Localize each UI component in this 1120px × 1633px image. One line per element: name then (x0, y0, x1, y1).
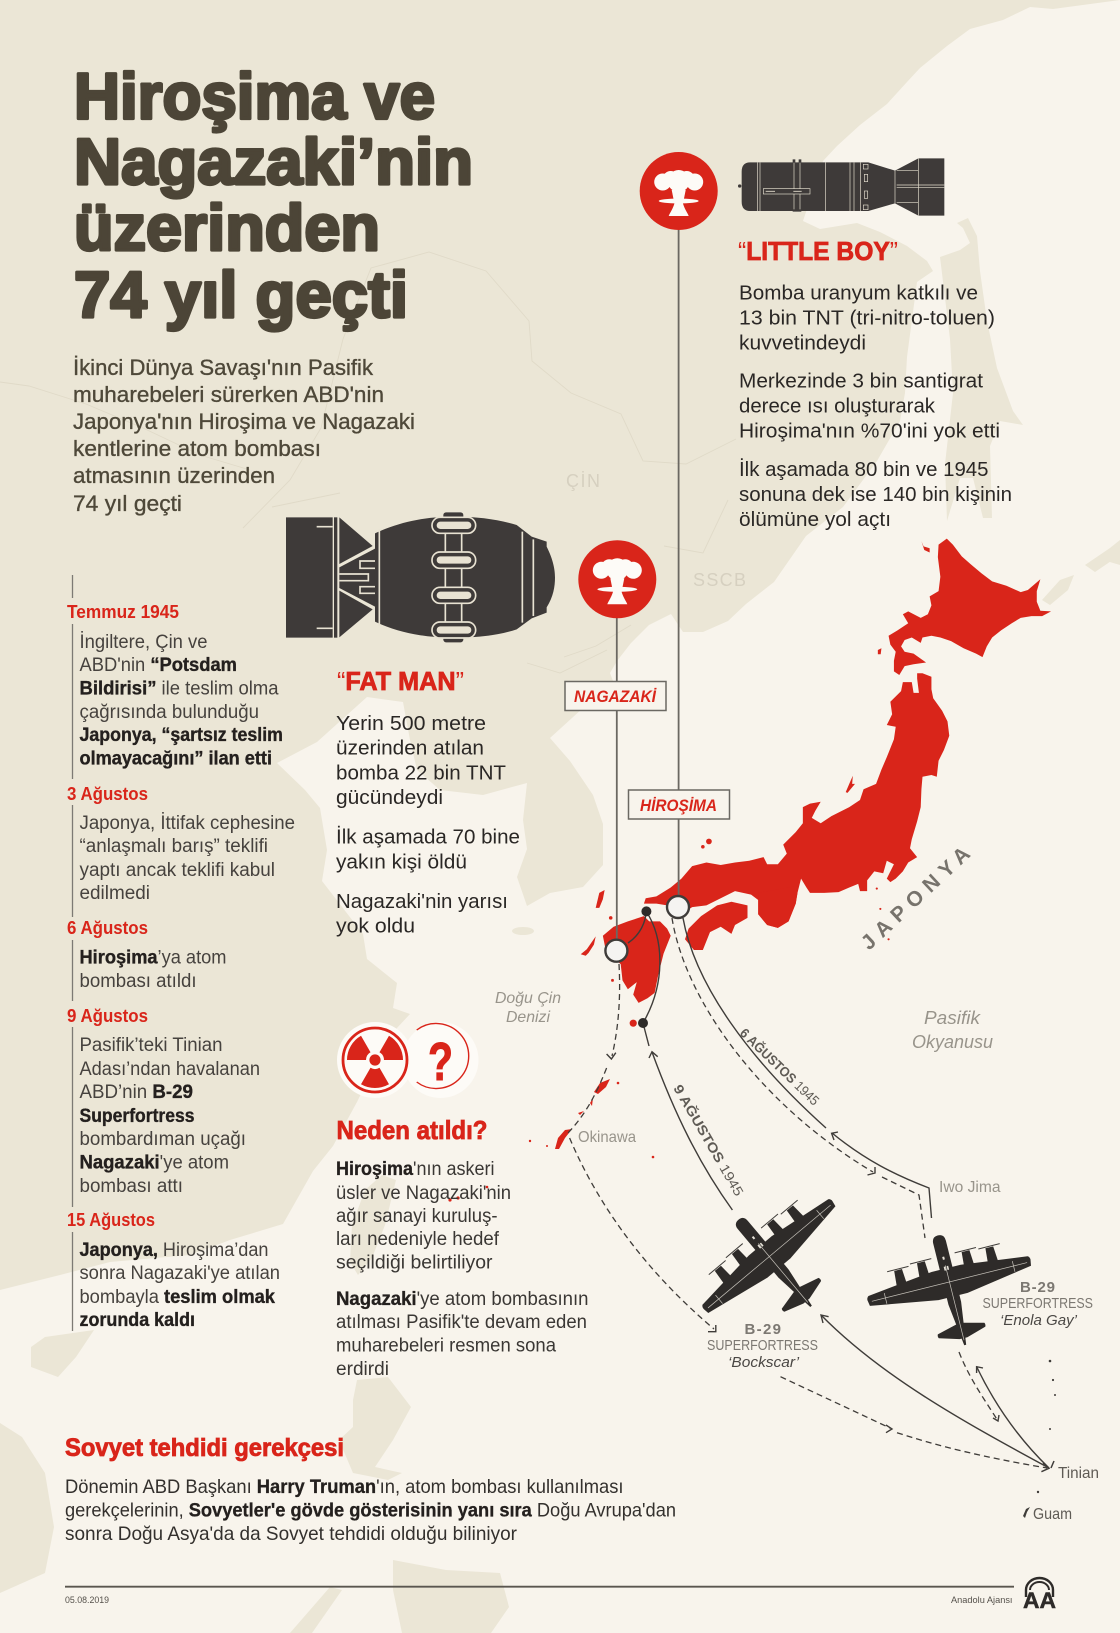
text: Fat Man details: üzerinden atılan (336, 736, 484, 760)
text: reasons: atılması Pasifik'te devam eden (336, 1312, 587, 1333)
text: Little Boy details: ölümüne yol açtı (739, 508, 891, 531)
intro paragraph: 74 yıl geçti (73, 491, 182, 516)
country label: Japonya: JAPONYA (857, 842, 975, 955)
footer (65, 1578, 1056, 1613)
timeline entries: bombası atıldı (80, 971, 196, 992)
label: Bockscar: B-29 (744, 1321, 781, 1338)
Neden atıldı panel (336, 1022, 588, 1380)
timeline entries: zorunda kaldı (80, 1310, 195, 1331)
text: Soviet rationale: Dönemin ABD Başkanı Harry Truman'ın, atom bombası kullanılması (65, 1476, 624, 1498)
text: Little Boy details: kuvvetindeydi (739, 332, 866, 354)
timeline entries: yaptı ancak teklifi kabul (80, 860, 275, 881)
marker: Hiroşima target (667, 896, 689, 918)
map: Ryukyu islands in red (448, 1079, 654, 1202)
map labels: seas and places: Guam (1033, 1506, 1072, 1523)
label: Enola Gay: B-29 (1020, 1279, 1055, 1296)
text: Little Boy details: İlk aşamada 80 bin ve 1945 (739, 458, 988, 481)
title: Nagazaki’nin (74, 125, 473, 198)
timeline entries: Superfortress (80, 1106, 194, 1127)
timeline entries: edilmedi (80, 883, 150, 904)
label: Nagazaki: NAGAZAKİ (574, 687, 657, 706)
text: Fat Man details: bomba 22 bin TNT (336, 762, 506, 784)
title: Hiroşima ve (74, 60, 435, 132)
title (74, 60, 473, 331)
title: 74 yıl geçti (74, 258, 408, 331)
timeline entries: bombardıman uçağı (80, 1129, 246, 1150)
intro paragraph: Japonya'nın Hiroşima ve Nagazaki (73, 409, 415, 434)
text: reasons (336, 1159, 588, 1380)
text: Soviet rationale: sonra Doğu Asya'da da Sovyet tehdidi olduğu biliniyor (65, 1523, 517, 1545)
timeline dates: Temmuz 1945 (67, 602, 179, 622)
map labels: seas and places: Doğu Çin (495, 990, 561, 1007)
waypoint dots (638, 906, 651, 1028)
date: 05.08.2019 (65, 1595, 109, 1606)
timeline entries: ABD'nin “Potsdam (80, 655, 237, 676)
logo: AA (1023, 1578, 1056, 1613)
heading: Fat Man: “FAT MAN” (337, 666, 464, 696)
icon: Little Boy bomb (738, 158, 944, 216)
icon: mushroom cloud badge (Fat Man) (578, 540, 656, 618)
timeline dates: 15 Ağustos (67, 1210, 155, 1230)
Fat Man panel (286, 512, 656, 945)
heading: Little Boy: “LITTLE BOY” (738, 236, 898, 266)
text: Soviet rationale (65, 1476, 676, 1545)
timeline entries: “anlaşmalı barış” teklifi (80, 836, 268, 857)
label: Enola Gay: SUPERFORTRESS (982, 1296, 1093, 1312)
source: Anadolu Ajansı (951, 1595, 1012, 1606)
route label: 6 Ağustos 1945: 6 AĞUSTOS 1945 (737, 1025, 822, 1108)
map: Pacific islands (1023, 1360, 1056, 1518)
logo: AA: AA (1023, 1588, 1056, 1613)
label: Bockscar: ‘Bockscar’ (728, 1355, 800, 1371)
timeline entries: bombayla teslim olmak (80, 1287, 275, 1308)
timeline dates (67, 602, 179, 1230)
text: Little Boy details: Hiroşima'nın %70'ini yok etti (739, 420, 1000, 442)
text: Little Boy details (739, 282, 1012, 531)
heading: Sovyet tehdidi gerekçesi: Sovyet tehdidi gerekçesi (65, 1434, 344, 1462)
icon: question mark badge: ? (428, 1032, 453, 1092)
icon: B-29 Bockscar (674, 1166, 875, 1360)
intro paragraph (73, 355, 415, 516)
map labels: seas and places: Iwo Jima (939, 1179, 1001, 1196)
timeline entries: Japonya, “şartsız teslim (80, 725, 283, 746)
map labels: seas and places: Pasifik (924, 1008, 981, 1028)
text: Fat Man details: yok oldu (336, 914, 415, 938)
label: Enola Gay (982, 1279, 1093, 1329)
text: Little Boy details: Bomba uranyum katkılı ve (739, 282, 978, 304)
text: Little Boy details: derece ısı oluşturarak (739, 394, 936, 418)
icon: Fat Man bomb (286, 512, 555, 642)
timeline entries: Bildirisi” ile teslim olma (80, 678, 279, 700)
text: Fat Man details: İlk aşamada 70 bine (336, 826, 520, 848)
intro paragraph: İkinci Dünya Savaşı'nın Pasifik (73, 355, 374, 380)
map labels: seas and places: Tinian (1058, 1465, 1099, 1482)
text: Little Boy details: Merkezinde 3 bin santigrat (739, 370, 983, 392)
text: Fat Man details: Yerin 500 metre (336, 712, 486, 735)
text: reasons: Nagazaki'ye atom bombasının (336, 1289, 588, 1310)
intro paragraph: muharebeleri sürerken ABD'nin (73, 382, 384, 407)
timeline entries (80, 632, 295, 1331)
timeline entries: Nagazaki'ye atom (80, 1152, 229, 1174)
timeline entries: Pasifik’teki Tinian (80, 1035, 222, 1056)
timeline rule (72, 575, 74, 1331)
label: Hiroşima (628, 790, 730, 819)
intro paragraph: atmasının üzerinden (73, 463, 275, 488)
timeline entries: çağrısında bulunduğu (80, 702, 259, 723)
Little Boy panel (640, 152, 1012, 900)
text: reasons: üsler ve Nagazaki'nin (336, 1183, 511, 1204)
text: reasons: seçildiği belirtiliyor (336, 1252, 493, 1274)
timeline entries: Hiroşima’ya atom (80, 948, 226, 968)
timeline entries: İngiltere, Çin ve (80, 632, 208, 653)
timeline entries: bombası attı (80, 1176, 183, 1197)
icon: question mark badge (402, 1022, 478, 1098)
intro paragraph: kentlerine atom bombası (73, 436, 321, 461)
map labels: countries: ÇİN (566, 471, 600, 491)
label: Bockscar: SUPERFORTRESS (707, 1338, 818, 1354)
text: Little Boy details: sonuna dek ise 140 bin kişinin (739, 483, 1012, 506)
map labels: countries: SSCB (693, 570, 746, 590)
timeline entries: sonra Nagazaki'ye atılan (80, 1263, 280, 1284)
Soviet section (65, 1434, 676, 1545)
label: Enola Gay: ‘Enola Gay’ (1000, 1313, 1078, 1329)
text: reasons: ağır sanayi kuruluş- (336, 1206, 498, 1227)
label: Hiroşima: HİROŞİMA (640, 796, 717, 815)
text: reasons: ları nedeniyle hedef (336, 1229, 500, 1250)
timeline entries: ABD’nin B-29 (80, 1082, 193, 1103)
text: Fat Man details (336, 712, 520, 938)
timeline entries: Adası’ndan havalanan (80, 1059, 260, 1080)
map labels: countries (566, 471, 746, 590)
route label: 9 Ağustos 1945: 9 AĞUSTOS 1945 (670, 1082, 746, 1199)
map labels: seas and places: Okyanusu (912, 1032, 993, 1052)
text: reasons: muharebeleri resmen sona (336, 1336, 556, 1356)
timeline entries: Japonya, Hiroşima’dan (80, 1240, 268, 1261)
text: reasons: Hiroşima'nın askeri (336, 1159, 494, 1180)
text: Soviet rationale: gerekçelerinin, Sovyetler'e gövde gösterisinin yanı sıra Doğu Avrupa'dan (65, 1500, 676, 1522)
flight routes (568, 911, 1049, 1472)
label: Nagazaki (565, 682, 666, 710)
icon: radiation badge (337, 1022, 413, 1098)
text: Little Boy details: 13 bin TNT (tri-nitro-toluen) (739, 306, 995, 330)
label: Bockscar (707, 1321, 818, 1371)
icon: B-29 Enola Gay (856, 1215, 1047, 1365)
text: Fat Man details: Nagazaki'nin yarısı (336, 890, 508, 913)
icon: mushroom cloud badge (Little Boy) (640, 152, 718, 230)
map labels: seas and places (495, 990, 1099, 1523)
title: üzerinden (74, 191, 380, 264)
timeline dates: 9 Ağustos (67, 1006, 148, 1026)
timeline (67, 575, 295, 1331)
text: Fat Man details: yakın kişi öldü (336, 850, 467, 874)
text: reasons: erdirdi (336, 1359, 389, 1380)
map labels: seas and places: Okinawa (578, 1129, 636, 1146)
heading: Neden atıldı: Neden atıldı? (336, 1115, 488, 1145)
text: Fat Man details: gücündeydi (336, 786, 443, 809)
timeline dates: 6 Ağustos (67, 918, 148, 938)
map: Japan in red (581, 539, 1051, 1027)
marker: Nagazaki target (605, 940, 627, 962)
timeline dates: 3 Ağustos (67, 784, 148, 804)
map labels: seas and places: Denizi (506, 1009, 550, 1026)
leader line: Hiroşima (678, 230, 680, 900)
timeline entries: olmayacağını” ilan etti (80, 748, 272, 770)
timeline entries: Japonya, İttifak cephesine (80, 813, 295, 834)
leader line: Nagazaki (616, 615, 618, 945)
